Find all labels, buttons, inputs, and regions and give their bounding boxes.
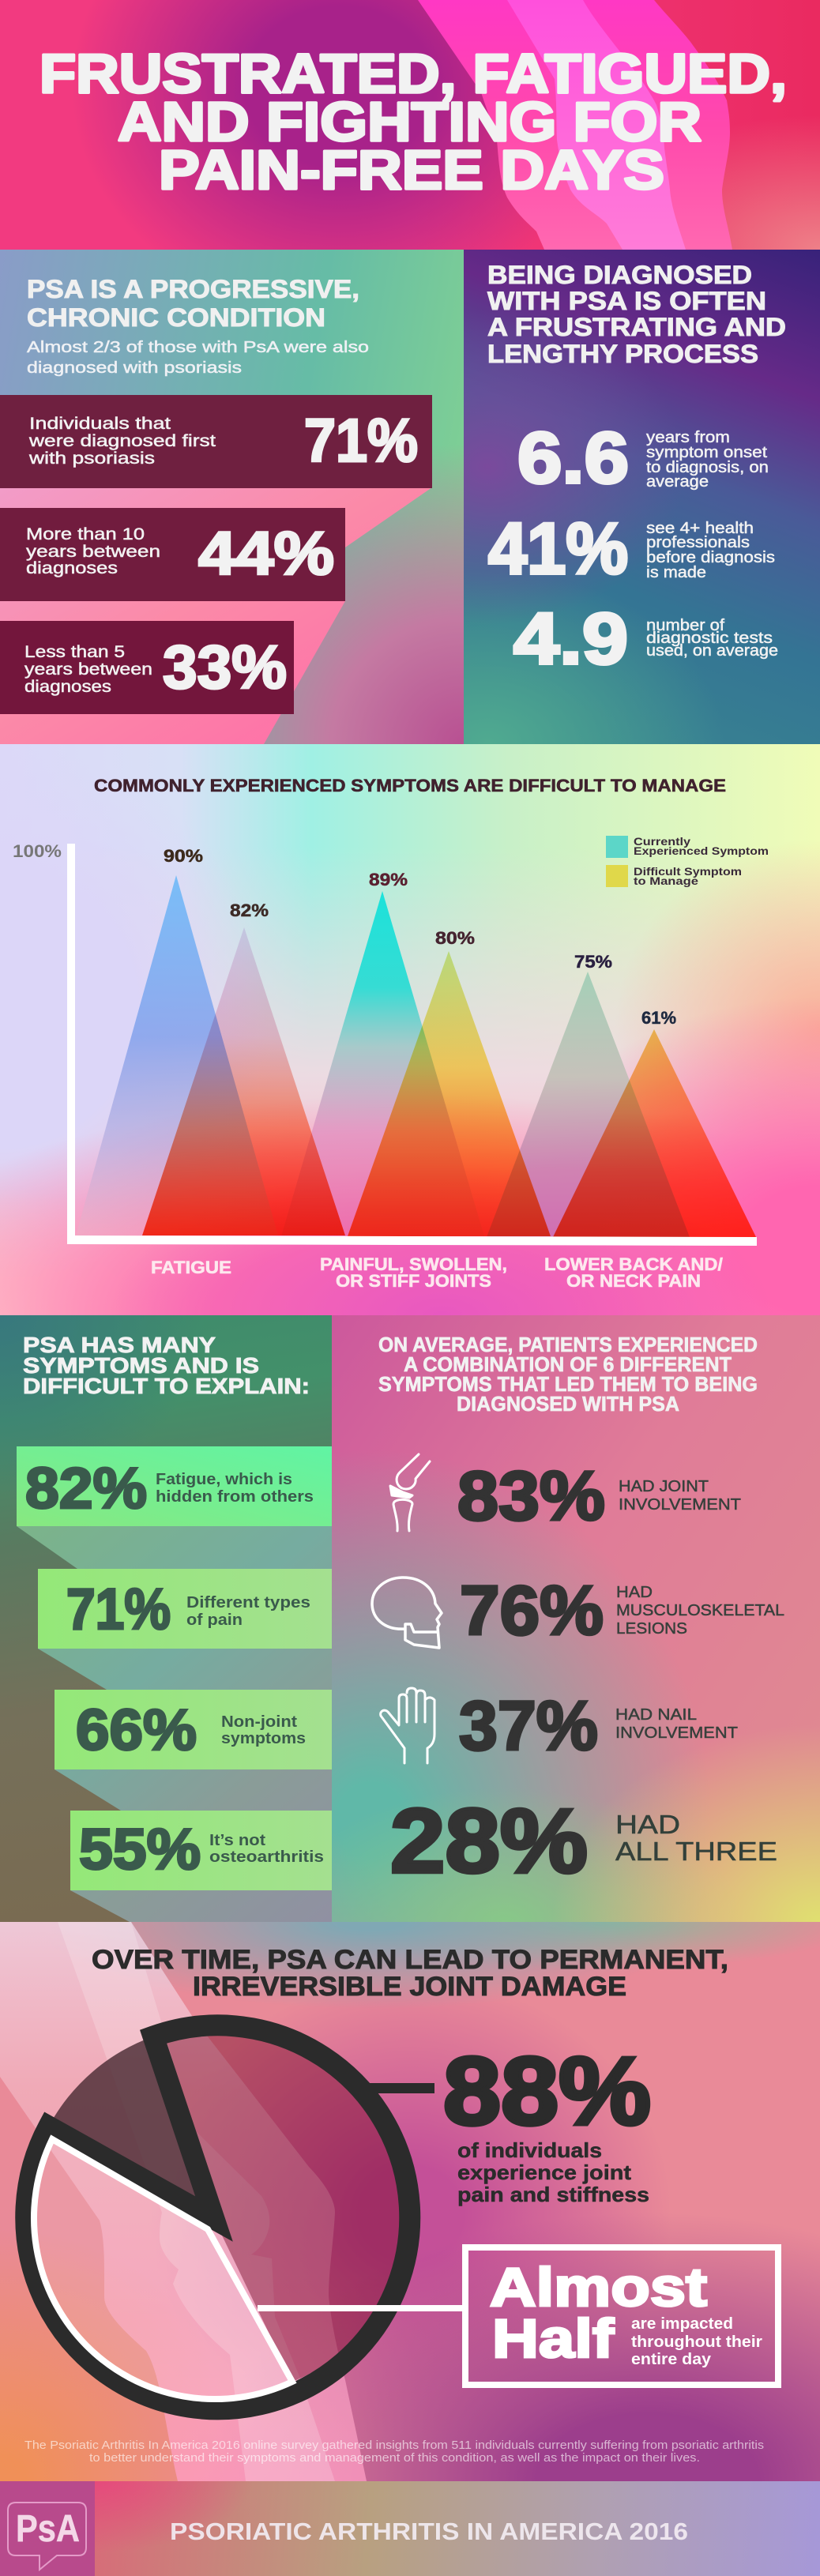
heading: SYMPTOMS THAT LED THEM TO BEING (378, 1372, 758, 1396)
37% nail involvement (459, 1687, 738, 1765)
staircase shadow (17, 1526, 332, 1922)
bar: 66% non-joint (55, 1690, 332, 1769)
panel: symptoms chart (0, 744, 820, 1315)
83% joint involvement: 83% (457, 1457, 605, 1535)
logo (0, 2481, 95, 2576)
callout: almost half: entire day (631, 2351, 712, 2368)
panel: many symptoms, difficult to explain (0, 1315, 332, 1922)
heading (23, 1333, 310, 1398)
callout: almost half: Almost (490, 2257, 707, 2318)
83% joint involvement: HAD JOINT (619, 1478, 709, 1495)
chart axes (67, 844, 757, 1246)
value labels: 82% (230, 901, 269, 920)
pie chart (26, 2023, 410, 2409)
heading (378, 1333, 758, 1416)
bar: 71%: 71% (304, 407, 418, 475)
title: PAIN-FREE DAYS (159, 139, 664, 201)
value labels: 61% (641, 1008, 676, 1028)
heading: DIAGNOSED WITH PSA (457, 1392, 679, 1416)
bar: 71% pain: Different types (186, 1594, 310, 1611)
callout: almost half: throughout their (631, 2333, 762, 2351)
stat: 4.9: diagnostic tests (646, 630, 773, 647)
28% all three: ALL THREE (615, 1837, 777, 1866)
logo: PsA (16, 2508, 80, 2550)
subheading: Almost 2/3 of those with PsA were also (27, 339, 369, 356)
title: AND FIGHTING FOR (118, 91, 702, 152)
stat: 6.6 years: to diagnosis, on (646, 459, 769, 476)
bar: 71%: Individuals that (29, 415, 171, 433)
knee illustration (0, 1922, 367, 2481)
28% all three: HAD (615, 1810, 680, 1839)
bar: 33%: years between (24, 660, 152, 679)
bar: 66% non-joint: symptoms (221, 1730, 306, 1747)
heading: OVER TIME, PSA CAN LEAD TO PERMANENT, (92, 1945, 728, 1975)
bar: 71%: with psoriasis (28, 449, 155, 468)
bar: 33% (0, 621, 294, 714)
survey note (24, 2439, 764, 2465)
icon: knee joint (390, 1454, 430, 1531)
bar: 71% pain: of pain (186, 1611, 243, 1629)
stat: 6.6 years: years from (646, 429, 730, 446)
legend: to Manage (634, 875, 699, 887)
panel: header (0, 0, 820, 250)
heading: ON AVERAGE, PATIENTS EXPERIENCED (378, 1333, 758, 1356)
stat: 41%: see 4+ health (646, 520, 754, 537)
value labels: 89% (369, 870, 408, 889)
bar: 55% osteoarthritis: It’s not (209, 1832, 265, 1849)
panel: combination of 6 symptoms (332, 1315, 820, 1922)
bar: 33%: Less than 5 (24, 643, 125, 661)
survey note: to better understand their symptoms and management of this condition, as well as the impact on their lives. (89, 2452, 700, 2465)
stat: 41%: before diagnosis (646, 549, 775, 566)
bar: 44% (0, 508, 345, 601)
category labels: FATIGUE (151, 1258, 231, 1277)
83% joint involvement: INVOLVEMENT (619, 1496, 741, 1514)
panel: permanent joint damage (0, 1922, 820, 2481)
title (39, 43, 787, 201)
heading: PSA HAS MANY (23, 1333, 216, 1357)
bar: 55% osteoarthritis: osteoarthritis (209, 1848, 324, 1866)
chart title: COMMONLY EXPERIENCED SYMPTOMS ARE DIFFICULT TO MANAGE (94, 776, 726, 795)
value labels: 90% (164, 846, 203, 866)
stat: 4.9: 4.9 (513, 599, 628, 679)
heading: PSA IS A PROGRESSIVE, (27, 275, 359, 303)
footer title: PSORIATIC ARTHRITIS IN AMERICA 2016 (170, 2518, 688, 2545)
legend: Difficult Symptom (634, 866, 742, 878)
bar: 44%: 44% (198, 520, 334, 588)
76% musculoskeletal lesions: MUSCULOSKELETAL (616, 1602, 784, 1619)
callout: almost half: are impacted (631, 2315, 733, 2333)
heading: IRREVERSIBLE JOINT DAMAGE (193, 1972, 626, 2002)
76% musculoskeletal lesions: HAD (616, 1584, 653, 1601)
category labels: OR NECK PAIN (566, 1271, 701, 1291)
37% nail involvement: 37% (459, 1687, 598, 1765)
bar: 55% osteoarthritis: 55% (79, 1818, 201, 1882)
value labels: 80% (435, 928, 475, 948)
legend: Currently (634, 836, 691, 848)
bar: 82% fatigue: hidden from others (156, 1488, 314, 1506)
bar: 82% fatigue (17, 1446, 332, 1526)
76% musculoskeletal lesions: LESIONS (616, 1620, 687, 1638)
bar: 82% fatigue: 82% (25, 1457, 147, 1521)
legend: Experienced Symptom (634, 845, 769, 857)
heading: WITH PSA IS OFTEN (487, 287, 766, 315)
connector lines (258, 2083, 465, 2311)
stat: 6.6 years: average (646, 473, 709, 491)
bar: 66% non-joint: 66% (76, 1698, 197, 1762)
panel: footer (0, 2481, 820, 2576)
37% nail involvement: HAD NAIL (615, 1706, 697, 1724)
28% all three: 28% (390, 1791, 588, 1892)
stat: 6.6 years: symptom onset (646, 444, 767, 461)
76% musculoskeletal lesions: 76% (460, 1571, 604, 1649)
heading: BEING DIAGNOSED (487, 261, 752, 289)
bar: 44%: More than 10 (26, 525, 145, 543)
stat: 6.6 years: 6.6 (517, 418, 629, 498)
title: FRUSTRATED, FATIGUED, (39, 43, 787, 104)
bar: 71% pain: 71% (66, 1578, 171, 1641)
stat: 41% (488, 509, 775, 589)
stat: 41%: professionals (646, 534, 750, 551)
value labels (164, 846, 676, 1028)
triangle chart (76, 875, 756, 1237)
stat: 88%: of individuals (457, 2138, 602, 2162)
bar: 71% (0, 395, 432, 488)
heading: SYMPTOMS AND IS (23, 1353, 259, 1378)
category labels (151, 1254, 723, 1291)
icon: hand (381, 1688, 434, 1763)
heading: A COMBINATION OF 6 DIFFERENT (404, 1352, 732, 1376)
stat: 41%: 41% (488, 509, 628, 589)
stat: 6.6 years (517, 418, 769, 498)
callout: almost half: Half (492, 2308, 615, 2369)
panel: being diagnosed with PsA (464, 250, 820, 744)
category labels: LOWER BACK AND/ (544, 1254, 723, 1274)
stat: 88%: 88% (443, 2037, 651, 2145)
bar: 33%: 33% (163, 634, 287, 701)
bar: 71% pain (38, 1569, 332, 1649)
knee illustration (418, 0, 732, 250)
bar: 82% fatigue: Fatigue, which is (156, 1471, 292, 1488)
survey note: The Psoriatic Arthritis In America 2016 online survey gathered insights from 511 individuals currently suffering from psoriatic arthritis (24, 2439, 764, 2452)
category labels: OR STIFF JOINTS (336, 1271, 491, 1291)
axis label 100%: 100% (13, 841, 62, 861)
stat: 41%: is made (646, 564, 706, 581)
category labels: PAINFUL, SWOLLEN, (320, 1254, 507, 1274)
stat: 4.9: number of (646, 617, 724, 634)
bar: 66% non-joint: Non-joint (221, 1713, 297, 1731)
stat: 88%: experience joint (457, 2160, 631, 2184)
legend (606, 836, 769, 887)
83% joint involvement (457, 1457, 741, 1535)
stat: 88% (443, 2037, 651, 2206)
heading (487, 261, 786, 368)
panel: PsA is a progressive chronic condition (0, 250, 464, 744)
28% all three (390, 1791, 777, 1892)
peach shadow shape behind bars (0, 487, 432, 744)
bar: 55% osteoarthritis (70, 1811, 332, 1890)
heading (92, 1945, 728, 2002)
bar: 71%: were diagnosed first (28, 432, 216, 450)
stat: 4.9: used, on average (646, 642, 778, 660)
bar: 33%: diagnoses (24, 678, 111, 696)
stat: 88%: pain and stiffness (457, 2183, 649, 2206)
heading: A FRUSTRATING AND (487, 313, 786, 341)
heading (27, 275, 359, 332)
value labels: 75% (574, 952, 612, 972)
bar: 44%: diagnoses (26, 559, 118, 577)
subheading (27, 339, 369, 377)
heading: CHRONIC CONDITION (27, 303, 325, 332)
heading: DIFFICULT TO EXPLAIN: (23, 1374, 310, 1398)
bar: 44%: years between (26, 543, 160, 561)
stat: 4.9 (513, 599, 778, 679)
icon: skull (372, 1578, 442, 1648)
76% musculoskeletal lesions (460, 1571, 784, 1649)
heading: LENGTHY PROCESS (487, 340, 758, 368)
subheading: diagnosed with psoriasis (27, 359, 242, 377)
37% nail involvement: INVOLVEMENT (615, 1724, 738, 1742)
callout: almost half (465, 2247, 778, 2385)
